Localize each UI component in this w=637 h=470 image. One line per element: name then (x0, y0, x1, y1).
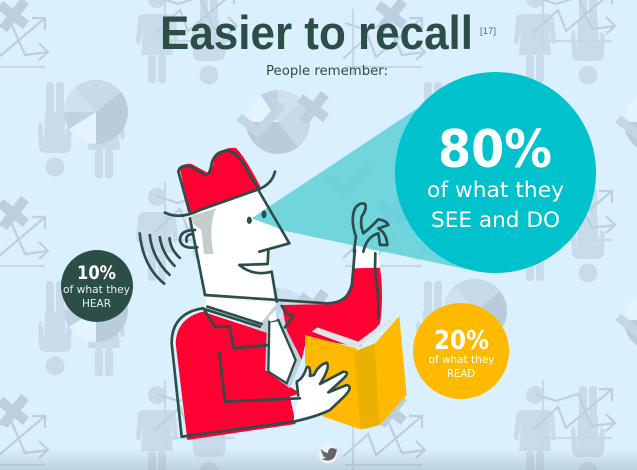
vision beam (252, 100, 480, 272)
citation reference: [17] (480, 26, 496, 36)
callout: 80 percent: SEE and DO (431, 208, 560, 233)
hair (191, 208, 216, 254)
hat (180, 148, 261, 213)
illustration: man reading a book (140, 148, 407, 440)
callout: 20 percent (413, 303, 509, 399)
beam tip over face (252, 207, 282, 229)
title: Easier to recall (160, 6, 473, 59)
callout: 80 percent: of what they (427, 178, 564, 203)
lower hand (293, 363, 350, 422)
subtitle: People remember: (266, 64, 388, 79)
callout: 20 percent: 20% (434, 326, 489, 356)
callout: 80 percent: 80% (438, 120, 552, 180)
wrist of raised hand (354, 245, 380, 268)
callout: 20 percent: READ (447, 368, 475, 380)
book (305, 316, 407, 429)
callout: 20 percent: of what they (428, 354, 494, 366)
callout: 10 percent: HEAR (82, 298, 111, 310)
callout: 10 percent: 10% (77, 263, 116, 284)
head and neck (188, 190, 289, 303)
character outlines (165, 151, 388, 437)
raised sleeve (282, 268, 382, 360)
tie (260, 310, 302, 388)
callout: 10 percent (61, 250, 133, 322)
callout: 10 percent: of what they (63, 284, 130, 296)
eyes (247, 210, 266, 224)
shirt collar (205, 297, 277, 323)
icon: sound waves (140, 232, 181, 284)
jacket (176, 312, 300, 440)
callout: 80 percent (395, 72, 596, 273)
icon: twitter (318, 444, 338, 464)
